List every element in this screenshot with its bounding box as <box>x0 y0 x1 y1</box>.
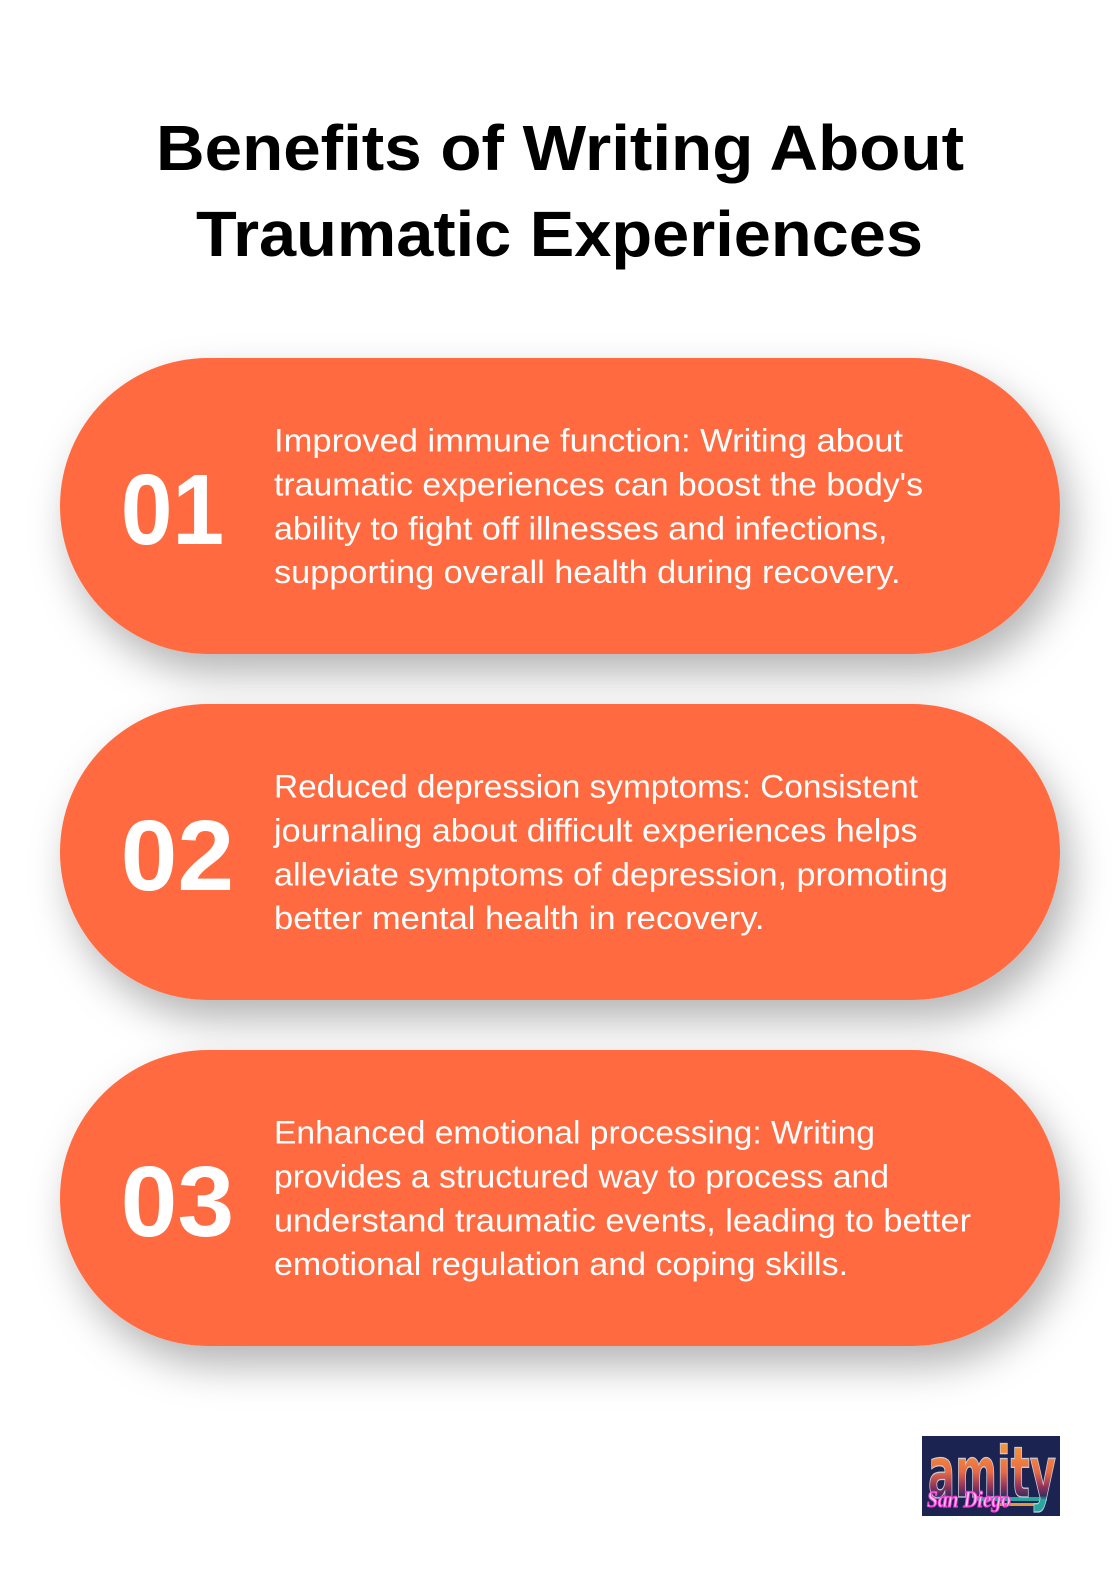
pill background 01 <box>60 358 1060 654</box>
logo script: San Diego: San Diego <box>927 1487 1011 1512</box>
title <box>156 112 964 270</box>
text: enhanced emotional processing: emotional regulation and coping skills. <box>274 1246 848 1282</box>
text: improved immune function: Improved immune function: Writing about <box>274 422 903 458</box>
text: enhanced emotional processing <box>274 1114 971 1282</box>
pill background 03 <box>60 1050 1060 1346</box>
title: Benefits of Writing About <box>156 112 964 184</box>
text: reduced depression symptoms: Reduced depression symptoms: Consistent <box>274 768 918 804</box>
text: improved immune function: ability to fight off illnesses and infections, <box>274 510 888 546</box>
text: enhanced emotional processing: Enhanced emotional processing: Writing <box>274 1114 875 1150</box>
icon: Amity San Diego logo <box>922 1432 1060 1516</box>
text: enhanced emotional processing: understand traumatic events, leading to better <box>274 1202 971 1238</box>
number 02: 02 <box>121 800 234 912</box>
title: Traumatic Experiences <box>196 198 923 270</box>
text: reduced depression symptoms: better mental health in recovery. <box>274 900 764 936</box>
text: improved immune function: supporting overall health during recovery. <box>274 554 900 590</box>
text: improved immune function: traumatic experiences can boost the body's <box>274 466 923 502</box>
text: reduced depression symptoms: journaling about difficult experiences helps <box>273 812 918 848</box>
text: reduced depression symptoms: alleviate symptoms of depression, promoting <box>274 856 948 892</box>
text: improved immune function <box>274 422 923 590</box>
text: enhanced emotional processing: provides a structured way to process and <box>274 1158 889 1194</box>
text: reduced depression symptoms <box>273 768 948 936</box>
panel: benefit 03 <box>60 1050 1060 1346</box>
pill background 02 <box>60 704 1060 1000</box>
panel: benefit 02 <box>60 704 1060 1000</box>
number 01: 01 <box>121 454 224 566</box>
number 03: 03 <box>121 1146 234 1258</box>
panel: benefit 01 <box>60 358 1060 654</box>
